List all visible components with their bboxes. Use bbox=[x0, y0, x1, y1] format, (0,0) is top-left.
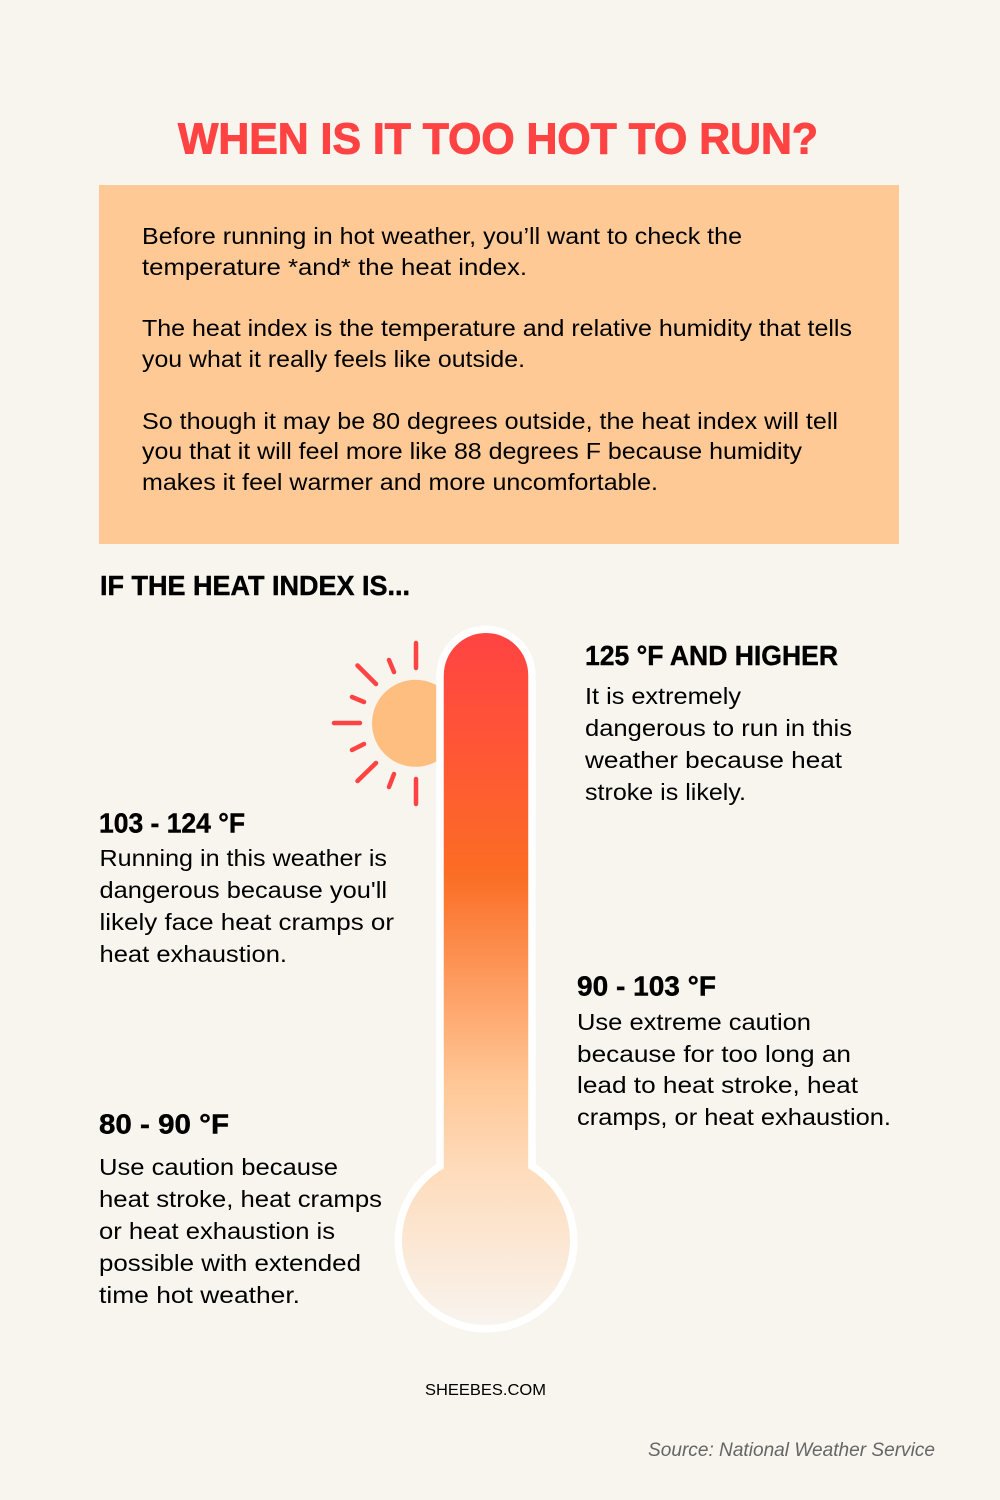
brand credit: SHEEBES.COM bbox=[425, 1382, 546, 1399]
text block: 103 to 124 F: Running in this weather is bbox=[100, 845, 387, 871]
text block: heat index example: you that it will feel more like 88 degrees F because humidity bbox=[142, 438, 803, 464]
text block: 90 to 103 F: Use extreme caution bbox=[577, 1009, 811, 1035]
text block: 80 to 90 F: or heat exhaustion is bbox=[99, 1218, 335, 1244]
panel: intro bbox=[99, 185, 899, 544]
text block: 80 to 90 F: Use caution because bbox=[99, 1154, 338, 1180]
text block: 80 to 90 F: possible with extended bbox=[99, 1250, 361, 1276]
text block: 90 to 103 F: 90 - 103 °F bbox=[577, 970, 716, 1002]
text block: 80 to 90 F bbox=[99, 1108, 382, 1308]
text block: 103 to 124 F: dangerous because you'll bbox=[100, 877, 387, 903]
text block: heat index definition: The heat index is the temperature and relative humidity that tells bbox=[142, 315, 852, 341]
thermometer bbox=[402, 633, 570, 1325]
text block: 80 to 90 F: 80 - 90 °F bbox=[99, 1108, 229, 1140]
text block: heat index example bbox=[142, 408, 838, 495]
text block: 125 F and higher bbox=[584, 640, 852, 805]
text block: check temperature and heat index bbox=[142, 223, 742, 280]
text block: 90 to 103 F: cramps, or heat exhaustion. bbox=[577, 1104, 891, 1130]
text block: heat index definition bbox=[142, 315, 852, 372]
text block: 125 F and higher: weather because heat bbox=[584, 747, 843, 773]
source note: Source: National Weather Service bbox=[648, 1440, 935, 1461]
text block: 80 to 90 F: heat stroke, heat cramps bbox=[99, 1186, 382, 1212]
text block: heat index example: So though it may be 80 degrees outside, the heat index will tell bbox=[142, 408, 838, 434]
text block: 90 to 103 F: because for too long an bbox=[577, 1041, 851, 1067]
text block: 103 to 124 F: likely face heat cramps or bbox=[100, 909, 394, 935]
text block: check temperature and heat index: Before running in hot weather, you’ll want to check the bbox=[142, 223, 742, 249]
text block: 90 to 103 F: lead to heat stroke, heat bbox=[577, 1072, 859, 1098]
text block: 103 to 124 F: heat exhaustion. bbox=[100, 941, 287, 967]
heading: if the heat index is: IF THE HEAT INDEX IS... bbox=[100, 570, 410, 601]
text block: heat index definition: you what it really feels like outside. bbox=[142, 346, 525, 372]
text block: heat index example: makes it feel warmer and more uncomfortable. bbox=[142, 469, 658, 495]
text block: 125 F and higher: dangerous to run in this bbox=[585, 715, 852, 741]
text block: 90 to 103 F bbox=[577, 970, 891, 1130]
text block: 103 to 124 F: 103 - 124 °F bbox=[99, 808, 245, 838]
text block: 125 F and higher: 125 °F AND HIGHER bbox=[585, 640, 838, 671]
icon: sun bbox=[334, 643, 459, 804]
text block: 125 F and higher: It is extremely bbox=[585, 683, 742, 709]
text block: 125 F and higher: stroke is likely. bbox=[585, 779, 746, 805]
text block: check temperature and heat index: temperature *and* the heat index. bbox=[142, 254, 527, 280]
title: WHEN IS IT TOO HOT TO RUN? bbox=[178, 114, 818, 164]
text block: 80 to 90 F: time hot weather. bbox=[99, 1282, 300, 1308]
text block: 103 to 124 F bbox=[99, 808, 394, 967]
